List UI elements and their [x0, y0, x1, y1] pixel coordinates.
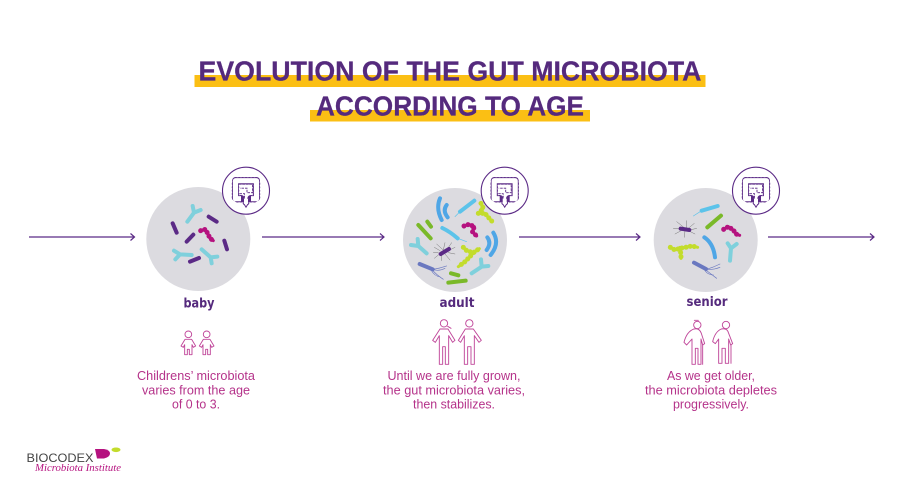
panel: senior microbiota: [654, 167, 780, 310]
title: [194, 56, 706, 122]
label: baby: baby: [184, 296, 215, 312]
icon: seniors: [684, 320, 733, 364]
text: senior description: As we get older,: [667, 368, 755, 383]
icon: gut: [222, 167, 270, 214]
title: EVOLUTION OF THE GUT MICROBIOTA: [198, 56, 702, 86]
baby bacteria: [173, 206, 227, 263]
icon: adults: [433, 320, 481, 364]
text: senior description: [645, 368, 777, 412]
arrow: adult to senior: [519, 234, 640, 240]
label: adult: adult: [440, 296, 474, 311]
text: senior description: progressively.: [673, 396, 749, 412]
panel: adult microbiota: [403, 167, 528, 311]
text: adult description: then stabilizes.: [413, 396, 495, 412]
text: baby description: [137, 368, 256, 412]
adult bacteria: [411, 198, 496, 283]
icon: gut: [732, 167, 780, 214]
text: adult description: the gut microbiota varies,: [383, 382, 525, 398]
text: adult description: Until we are fully grown,: [388, 368, 520, 383]
label: senior: senior: [686, 295, 728, 310]
senior bacteria: [670, 206, 740, 278]
logo: Biocodex Microbiota Institute: Microbiota Institute: [34, 463, 121, 474]
text: adult description: [383, 368, 525, 412]
arrow: baby to adult: [262, 234, 384, 240]
icon: gut: [481, 167, 528, 214]
logo: Biocodex Microbiota Institute: [26, 448, 121, 474]
title: ACCORDING TO AGE: [316, 90, 584, 122]
text: baby description: Childrens’ microbiota: [137, 368, 256, 383]
arrow: into baby: [29, 234, 134, 240]
icon: babies: [181, 331, 214, 355]
arrow: onward from senior: [768, 234, 874, 240]
text: baby description: of 0 to 3.: [172, 396, 220, 412]
text: baby description: varies from the age: [142, 382, 250, 398]
logo: Biocodex Microbiota Institute: BIOCODEX: [26, 453, 94, 465]
text: senior description: the microbiota depletes: [645, 382, 777, 398]
panel: baby microbiota: [146, 167, 270, 312]
